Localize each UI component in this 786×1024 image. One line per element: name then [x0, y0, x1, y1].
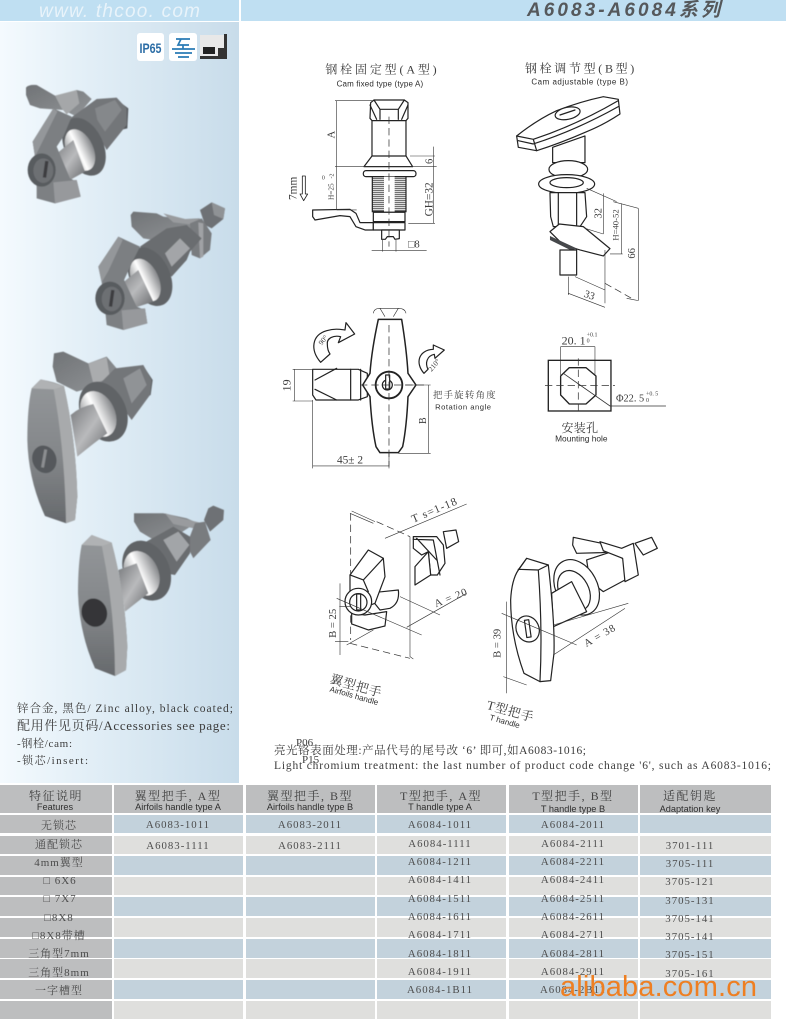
table blue rows [114, 815, 771, 999]
table header text: Airfoils handle type A [135, 802, 222, 812]
table column: features: □8X8带槽 [32, 928, 86, 942]
header bar: series title: A6083-A6084系列 [526, 0, 723, 21]
table column: features [28, 818, 90, 997]
text: chromium treatment note: 亮光铬表面处理:产品代号的尾号改 ‘6’ 即可,如A6083-1016; [274, 743, 586, 757]
table column: adaptation key: 3705-111 [666, 858, 714, 870]
table column: T handle A: A6084-1611 [408, 911, 472, 923]
icon: IP65: IP65 [140, 40, 162, 56]
drawing: cam adjustable type B: Cam adjustable (type B) [531, 77, 629, 86]
icon: IP65 [137, 33, 164, 61]
table column: T handle A: A6084-1011 [408, 819, 472, 831]
drawing: mounting hole: 安装孔 [561, 420, 598, 435]
text: chromium treatment note [274, 743, 771, 772]
table column: adaptation key [665, 840, 715, 980]
table column: T handle A: A6084-1411 [408, 874, 472, 886]
table header text [29, 788, 721, 814]
table column: T handle A: A6084-1111 [408, 838, 472, 850]
drawing: cam fixed type A: Cam fixed type (type A) [337, 80, 424, 89]
table column: adaptation key: 3705-131 [665, 895, 715, 907]
table column: airfoil A: A6083-1111 [146, 840, 210, 852]
drawing: T handle isometric [485, 537, 657, 730]
header bar: website [0, 0, 239, 22]
drawing: T handle isometric: A = 38 [582, 623, 618, 650]
drawing: rotation angle view: 把手旋转角度 [433, 389, 497, 401]
table column: T handle A: A6084-1811 [408, 948, 472, 960]
table column: airfoil B: A6083-2011 [278, 819, 342, 831]
drawing: T handle isometric: T handle [489, 713, 521, 730]
text: material and accessories: 配用件见页码/Accessories see page: [17, 718, 230, 733]
drawing: airfoil handle isometric: Airfoils handle [329, 685, 380, 707]
drawing: cam fixed type A: □8 [408, 239, 420, 250]
drawing: cam fixed type A: GH=32 [423, 182, 435, 216]
table column: airfoil B [278, 819, 342, 852]
text: material and accessories: -锁芯/insert: [17, 753, 88, 767]
table column: T handle A: A6084-1211 [408, 856, 472, 868]
drawing: T handle isometric: B = 39 [493, 629, 504, 658]
drawing: airfoil handle isometric: 翼型把手 [329, 671, 384, 700]
table column: T handle B: A6084-2111 [541, 838, 605, 850]
text: material and accessories [17, 701, 233, 767]
table column: T handle B: A6084-2511 [541, 893, 605, 905]
table column: features: □8X8 [44, 912, 74, 924]
drawing: mounting hole: +0.1 [587, 333, 597, 339]
table column: adaptation key: 3705-151 [665, 949, 715, 961]
table column: features: □ 6X6 [43, 875, 77, 887]
drawing: mounting hole: Φ22. 5 [616, 394, 644, 405]
icon: down arrow [300, 176, 308, 201]
drawing: airfoil handle isometric: A = 20 [433, 587, 470, 610]
drawing: airfoil handle isometric: T s=1-18 [410, 495, 460, 526]
table column: adaptation key: 3705-161 [665, 968, 715, 980]
icon: 210 degree rotation arrow: 210° [426, 357, 442, 373]
drawing: cam fixed type A: 6 [424, 158, 435, 164]
table: product codes [0, 785, 771, 1019]
table column: T handle B: A6084-2011 [541, 819, 605, 831]
icon: certification mark [169, 33, 197, 61]
table header text: 特征说明 [29, 788, 83, 803]
table header backgrounds [0, 785, 771, 813]
drawing: cam adjustable type B [517, 61, 638, 307]
photo: airfoil handle lock type B [95, 202, 225, 330]
table header text: Adaptation key [660, 804, 721, 814]
table header text: 翼型把手, B型 [267, 788, 353, 803]
drawing: cam adjustable type B: 33 [582, 289, 596, 303]
table column: adaptation key: 3705-141 [665, 913, 715, 925]
table column: airfoil B: A6083-2111 [278, 840, 342, 852]
table column: features: 三角型7mm [28, 946, 90, 960]
drawing: cam adjustable type B: 66 [627, 247, 638, 259]
drawing: cam fixed type A: H=25 [326, 183, 335, 200]
header bar: series title [241, 0, 786, 21]
icon: door profile [200, 34, 227, 59]
table column: T handle A: A6084-1711 [408, 929, 472, 941]
text: page references [296, 737, 320, 766]
table column: adaptation key: 3701-111 [666, 840, 714, 852]
header bar: website: www. thcoo. com [39, 1, 200, 22]
drawing: mounting hole: 0 [646, 398, 649, 404]
table column: adaptation key: 3705-141 [665, 931, 715, 943]
drawing: cam fixed type A [288, 61, 437, 252]
text: page references: P15 [302, 754, 320, 766]
drawing: mounting hole: 0 [587, 339, 590, 345]
table header text: Airfoils handle type B [267, 802, 353, 812]
text: chromium treatment note: Light chromium treatment: the last number of product code change '6', such as A6083-1016; [274, 760, 771, 772]
table header text: T handle type A [408, 802, 473, 812]
table column: adaptation key: 3705-121 [665, 876, 715, 888]
table column: airfoil A: A6083-1011 [146, 819, 210, 831]
panel: product photos background [0, 22, 239, 783]
drawing: mounting hole: 20. 1 [562, 334, 586, 348]
drawing: rotation angle view: 45± 2 [337, 454, 363, 466]
drawing: cam fixed type A: 0 [322, 175, 325, 181]
drawing: cam adjustable type B: 钢栓调节型(B型) [525, 61, 635, 76]
table feature column background [0, 815, 112, 1019]
table column: T handle A [407, 819, 473, 996]
table column: features: 一字槽型 [35, 983, 83, 997]
watermark: alibaba.com.cn: alibaba.com.cn [560, 971, 757, 1003]
table grey rows [114, 836, 771, 1019]
table column: features: 无锁芯 [41, 818, 77, 832]
table column: features: 通配锁芯 [35, 837, 83, 851]
icon: 90 degree rotation arrow: 90° [316, 333, 330, 347]
photo: T handle lock type A [27, 352, 153, 523]
table column: features: 三角型8mm [28, 965, 90, 979]
table header text: T型把手, A型 [400, 788, 482, 803]
drawing: cam adjustable type B: H=40-52 [611, 209, 621, 241]
text: page references: P06 [296, 737, 314, 749]
table column: T handle A: A6084-1B11 [407, 984, 473, 996]
table column: T handle B: A6084-2B11 [540, 984, 606, 996]
table header text: T型把手, B型 [532, 788, 614, 803]
drawing: airfoil handle isometric: B = 25 [328, 609, 339, 638]
icon: 210 degree rotation arrow [419, 345, 444, 373]
drawing: cam fixed type A: A [327, 131, 338, 139]
text: material and accessories: -钢栓/cam: [17, 736, 72, 750]
drawing: T handle isometric: T型把手 [485, 697, 536, 725]
table column: T handle B: A6084-2911 [541, 966, 605, 978]
icon: 90 degree rotation arrow [314, 323, 355, 362]
drawing: rotation angle view [280, 308, 497, 468]
table header text: 翼型把手, A型 [135, 788, 221, 803]
drawing: mounting hole: +0. 5 [646, 391, 658, 397]
drawing: cam fixed type A: 钢栓固定型(A型) [325, 61, 437, 76]
table column: T handle B: A6084-2811 [541, 948, 605, 960]
table column: T handle A: A6084-1911 [408, 966, 472, 978]
drawing: rotation angle view: Rotation angle [435, 402, 492, 411]
table column: features: □ 7X7 [43, 893, 77, 905]
table column: airfoil A [146, 819, 210, 852]
table header text: Features [37, 802, 74, 812]
text: material and accessories: 锌合金, 黑色/ Zinc alloy, black coated; [17, 701, 233, 715]
drawing: cam adjustable type B: 32 [594, 208, 605, 219]
table column: T handle B [540, 819, 606, 996]
drawing: cam fixed type A: -2 [329, 173, 335, 178]
table column: T handle B: A6084-2411 [541, 874, 605, 886]
table column: features: 4mm翼型 [34, 855, 84, 869]
drawing: mounting hole: Mounting hole [555, 434, 608, 444]
table column: T handle A: A6084-1511 [408, 893, 472, 905]
table header text: T handle type B [541, 804, 605, 814]
drawing: mounting hole [545, 333, 666, 444]
table header text: 适配钥匙 [663, 789, 717, 803]
drawing: cam fixed type A: 7mm [288, 176, 300, 200]
drawing: rotation angle view: B [418, 417, 429, 424]
table column: T handle B: A6084-2211 [541, 856, 605, 868]
drawing: rotation angle view: 19 [280, 379, 294, 391]
photo: T handle lock type B [78, 506, 224, 676]
drawing: airfoil handle isometric [328, 495, 470, 707]
photo: airfoil handle lock type A [26, 85, 128, 203]
table column: T handle B: A6084-2611 [541, 911, 605, 923]
table column: T handle B: A6084-2711 [541, 929, 605, 941]
